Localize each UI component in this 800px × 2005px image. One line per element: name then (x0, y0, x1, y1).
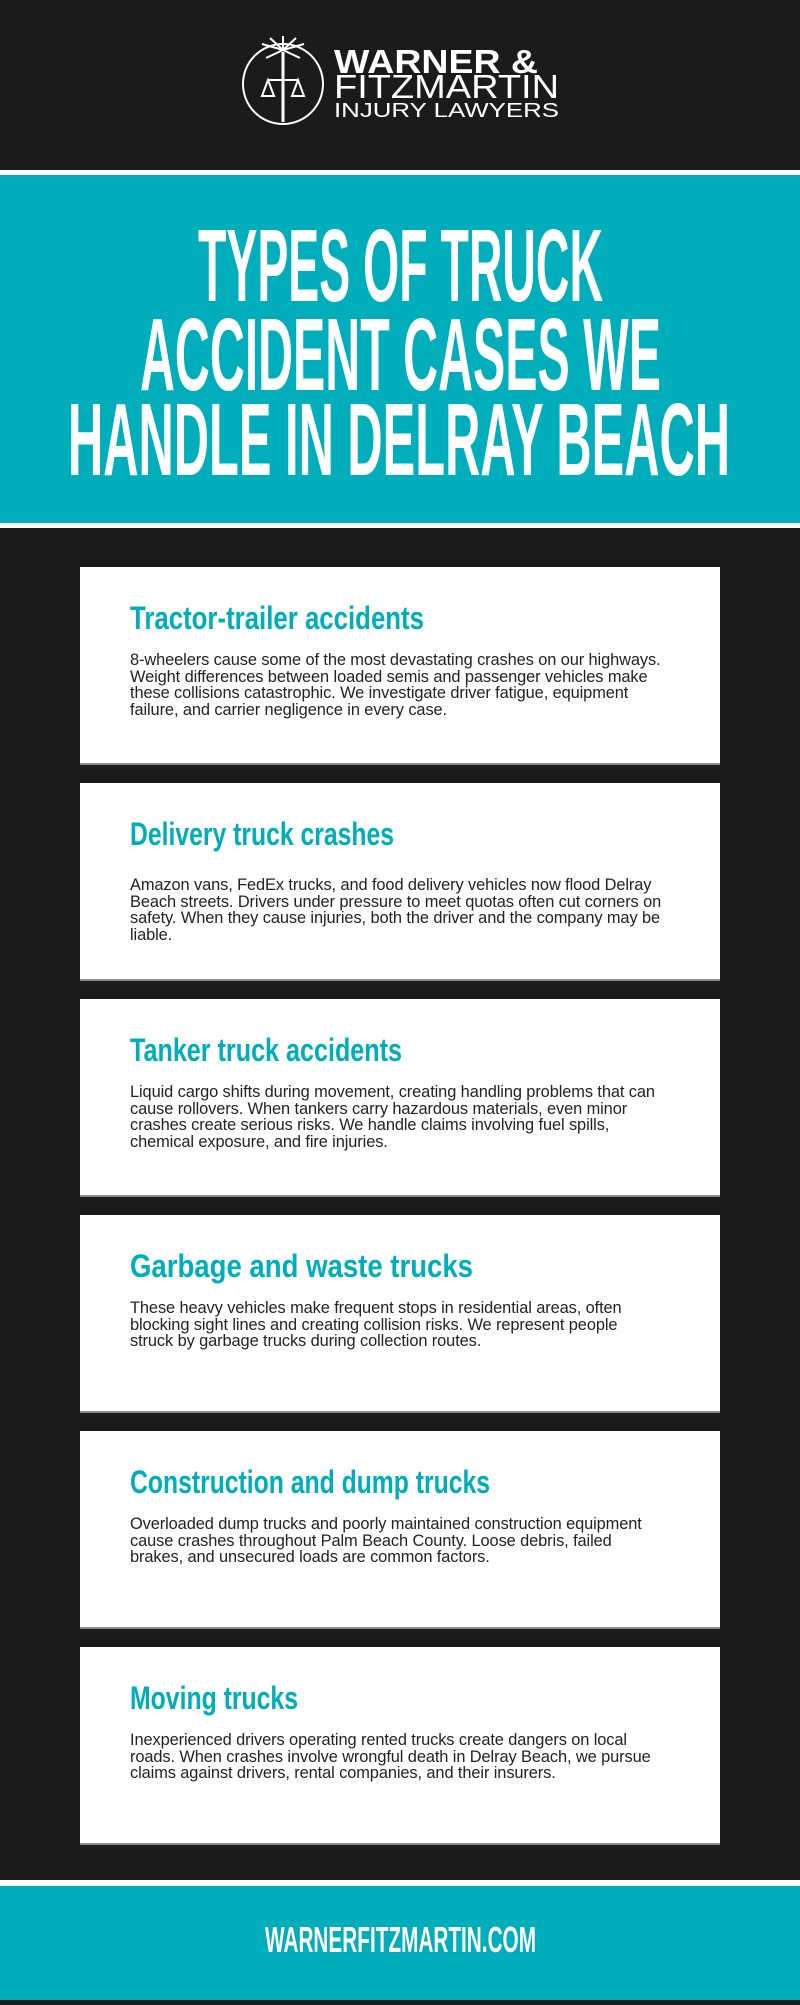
footer: website: WARNERFITZMARTIN.COM (265, 1919, 536, 1960)
panel: tanker truck accidents: Tanker truck accidents (130, 1032, 402, 1068)
logo text: WARNER & (334, 43, 538, 80)
panel: delivery truck crashes: Amazon vans, FedEx trucks, and food delivery vehicles now flood Delray (130, 876, 651, 894)
panel: moving trucks: Inexperienced drivers operating rented trucks create dangers on local (130, 1731, 627, 1749)
panel: construction and dump trucks: Construction and dump trucks (130, 1464, 490, 1500)
panel: delivery truck crashes: Delivery truck crashes (130, 816, 394, 852)
panel: tanker truck accidents: cause rollovers. When tankers carry hazardous materials, even minor (130, 1100, 627, 1118)
logo text (334, 43, 559, 122)
panel: garbage and waste trucks: blocking sight lines and creating collision risks. We represent people (130, 1316, 617, 1334)
panel: tractor-trailer accidents: 8-wheelers cause some of the most devastating crashes on our highways. (130, 651, 661, 669)
logo text: FITZMARTIN (334, 68, 559, 105)
panel: tractor-trailer accidents: Weight differences between loaded semis and passenger vehicles make (130, 668, 648, 686)
panel: construction and dump trucks: brakes, and unsecured loads are common factors. (130, 1548, 490, 1566)
panel: tanker truck accidents (80, 999, 720, 1197)
panel: tanker truck accidents: crashes create serious risks. We handle claims involving fuel spills, (130, 1116, 609, 1134)
panel: garbage and waste trucks: struck by garbage trucks during collection routes. (130, 1332, 481, 1350)
panel: tractor-trailer accidents (80, 567, 720, 765)
panel: construction and dump trucks: Overloaded dump trucks and poorly maintained construction equipment (130, 1515, 642, 1533)
panel: tanker truck accidents: Liquid cargo shifts during movement, creating handling problems that can (130, 1083, 655, 1101)
panel: tractor-trailer accidents: failure, and carrier negligence in every case. (130, 700, 447, 718)
panel: delivery truck crashes (80, 783, 720, 981)
title banner (0, 175, 800, 523)
panel: tractor-trailer accidents: these collisions catastrophic. We investigate driver fatigue, equipment (130, 684, 628, 702)
header: logo (0, 0, 800, 170)
panel: moving trucks: claims against drivers, rental companies, and their insurers. (130, 1764, 556, 1782)
panel: moving trucks (80, 1647, 720, 1845)
panel: moving trucks: roads. When crashes involve wrongful death in Delray Beach, we pursue (130, 1748, 651, 1766)
panel: delivery truck crashes: liable. (130, 926, 172, 944)
panel: delivery truck crashes: safety. When they cause injuries, both the driver and the company may be (130, 909, 660, 927)
panel: garbage and waste trucks: These heavy vehicles make frequent stops in residential areas, often (130, 1299, 622, 1317)
panel: tractor-trailer accidents: Tractor-trailer accidents (130, 600, 424, 636)
logo text: INJURY LAWYERS (334, 100, 559, 122)
panel: delivery truck crashes: Beach streets. Drivers under pressure to meet quotas often cut corners on (130, 892, 661, 910)
panel: tanker truck accidents: chemical exposure, and fire injuries. (130, 1132, 388, 1150)
panel: construction and dump trucks: cause crashes throughout Palm Beach County. Loose debris, failed (130, 1532, 612, 1550)
panel: construction and dump trucks (80, 1431, 720, 1629)
icon: palm and scales emblem (243, 36, 323, 124)
footer: website (0, 1886, 800, 2000)
panel: garbage and waste trucks: Garbage and waste trucks (130, 1248, 473, 1284)
panel: moving trucks: Moving trucks (130, 1680, 298, 1716)
panel: garbage and waste trucks (80, 1215, 720, 1413)
